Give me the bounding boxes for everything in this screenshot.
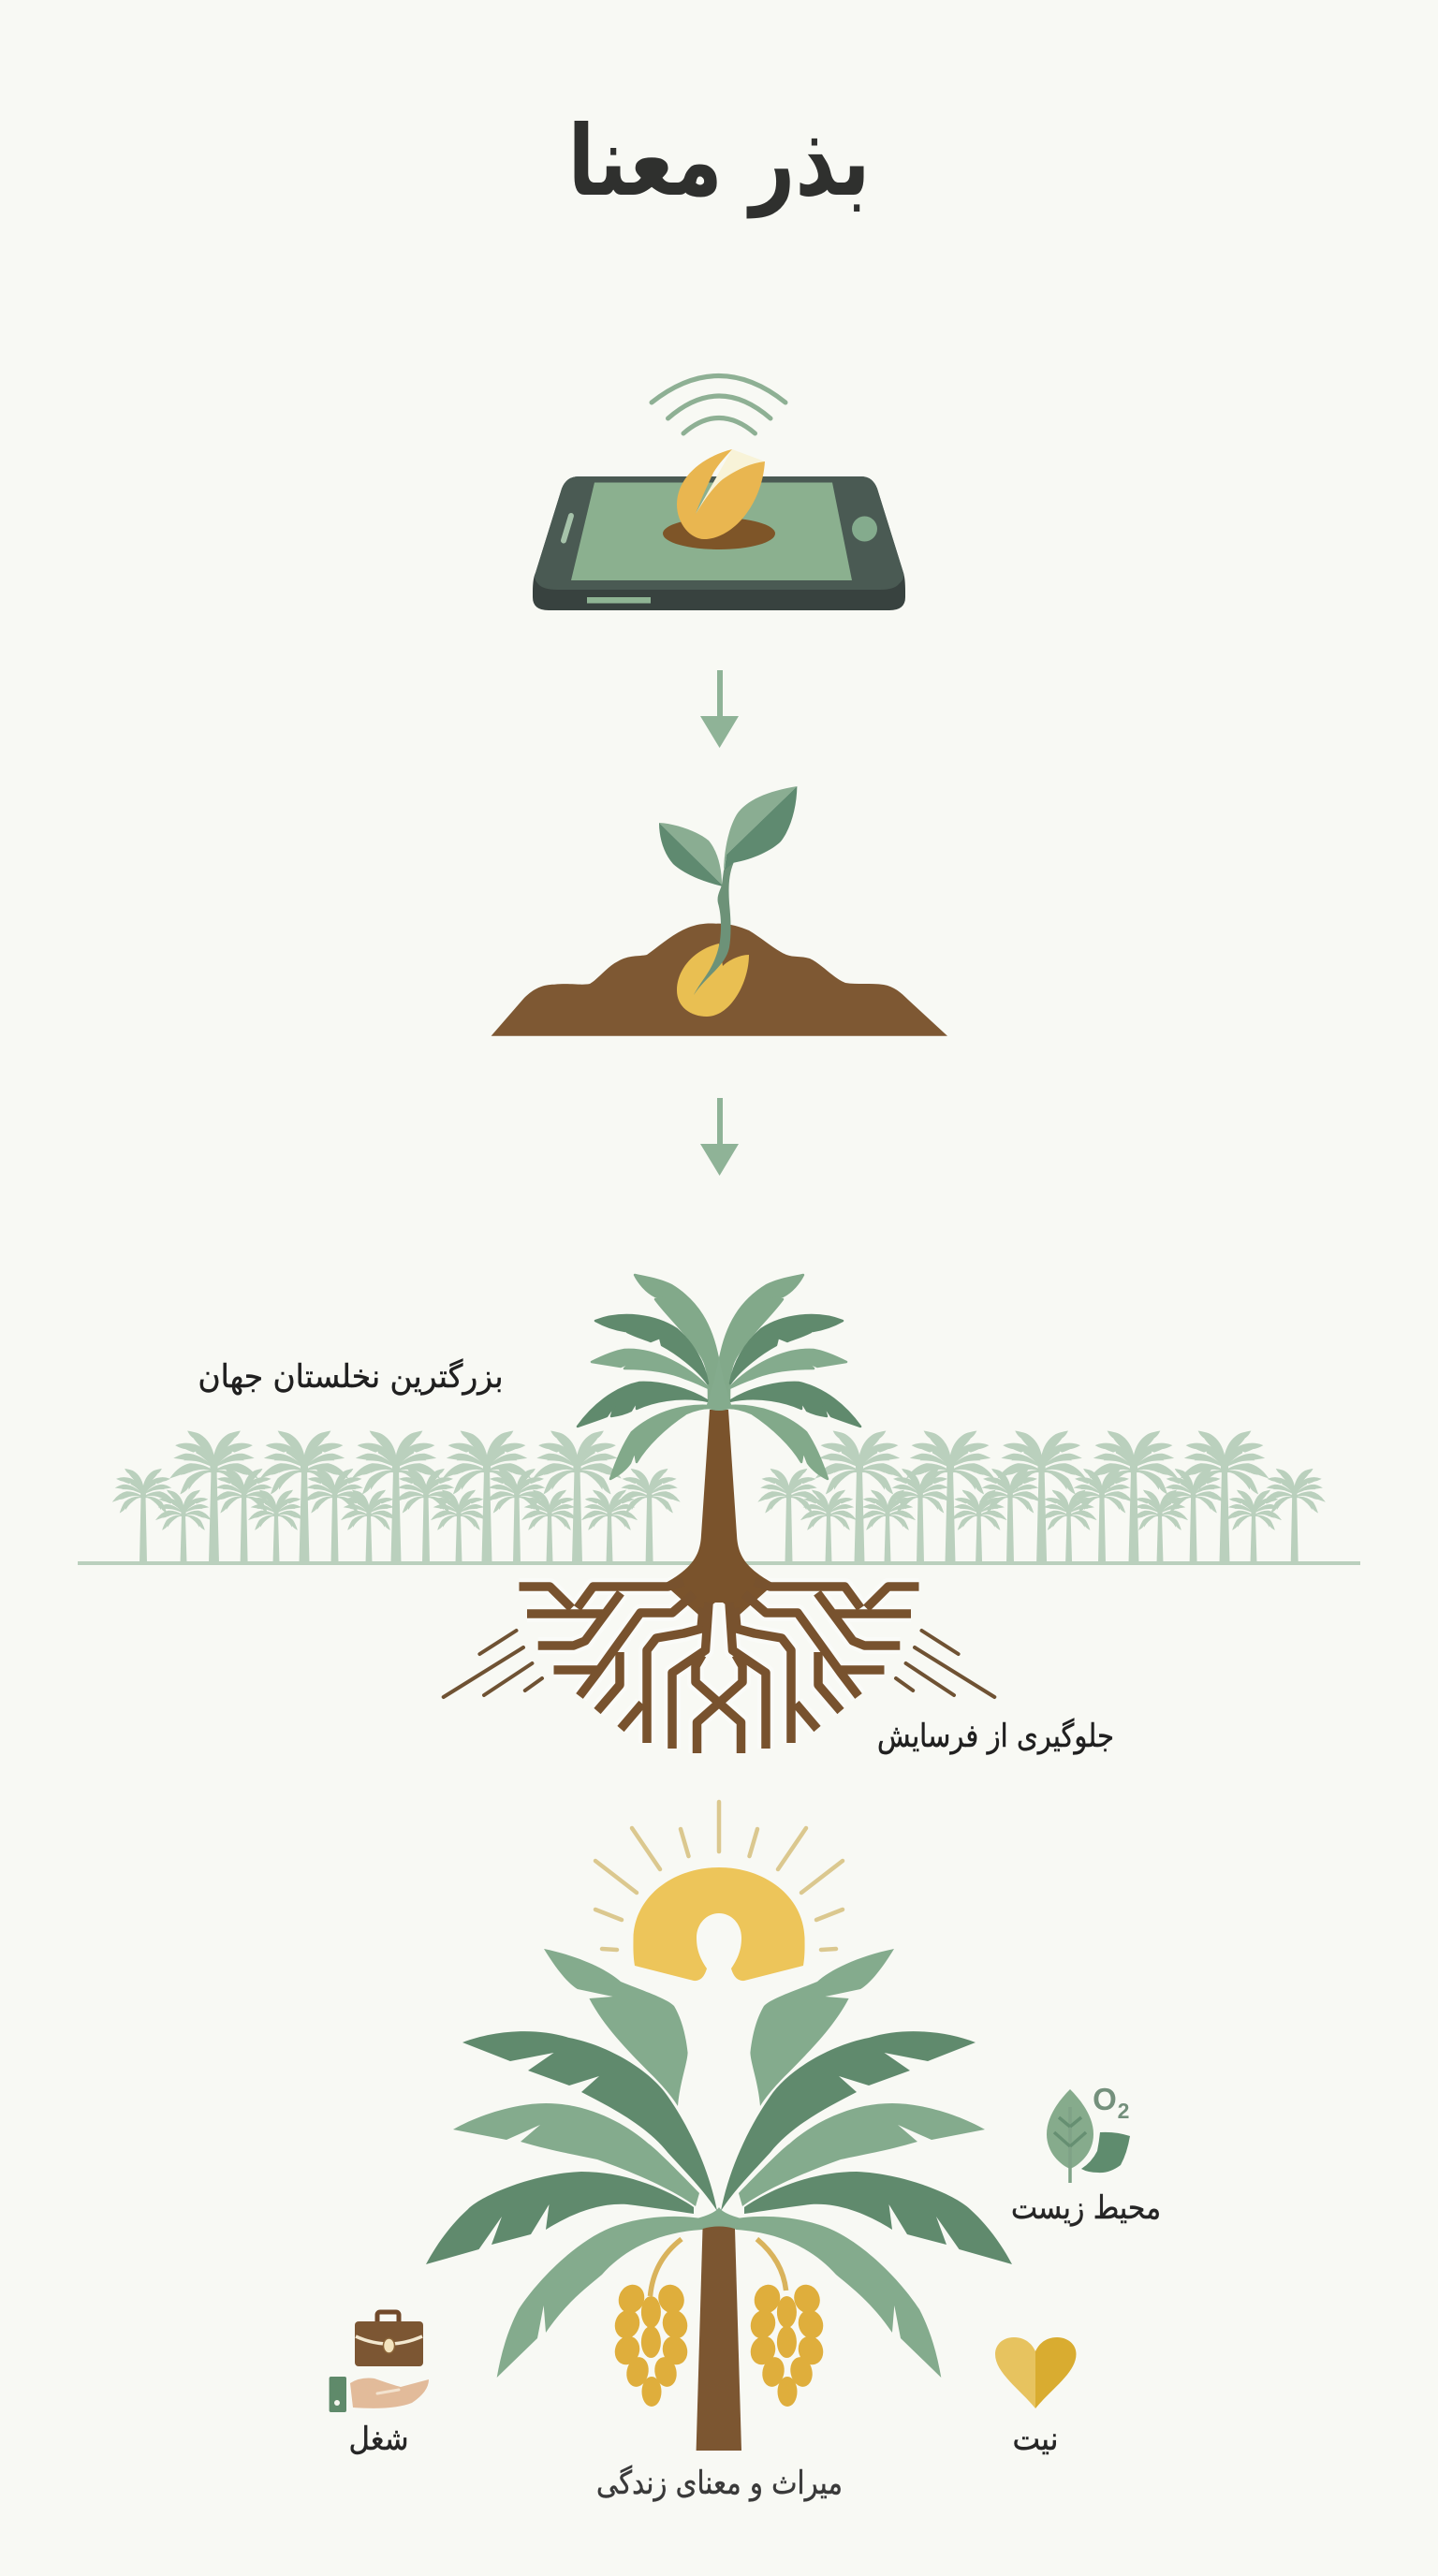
speaker slot — [564, 516, 571, 541]
sun disc — [633, 1867, 805, 1981]
icon: leaf with oxygen — [1047, 2082, 1130, 2183]
label: erosion prevention: جلوگیری از فرسایش — [877, 1718, 1114, 1755]
ground line — [78, 1561, 1360, 1565]
briefcase body — [355, 2321, 423, 2366]
O2 label — [1093, 2082, 1129, 2123]
crown hub — [689, 2207, 749, 2232]
sun — [595, 1802, 843, 1981]
title: بذر معنا — [567, 104, 871, 218]
date cluster right — [747, 2281, 827, 2407]
erosion lines — [444, 1631, 994, 1697]
bottom bar — [587, 597, 651, 603]
large palm tree with dates — [426, 1949, 1012, 2451]
O2 label: 2 — [1118, 2099, 1129, 2123]
icon: sprout in soil — [492, 786, 947, 1036]
sleeve — [330, 2377, 346, 2412]
roots — [519, 1582, 919, 1753]
seed — [677, 944, 749, 1017]
heart right half — [1035, 2337, 1077, 2408]
phone body — [533, 476, 905, 610]
trunk — [697, 2226, 741, 2451]
stem — [694, 863, 734, 995]
second leaf — [1081, 2132, 1130, 2173]
date stalks — [650, 2239, 786, 2296]
briefcase clasp — [384, 2338, 395, 2353]
seed — [677, 449, 765, 539]
briefcase handle — [377, 2312, 399, 2325]
icon: briefcase and hand — [330, 2312, 429, 2412]
phone screen — [571, 483, 852, 580]
heart left half — [995, 2337, 1035, 2408]
icon: heart — [995, 2337, 1077, 2408]
soil mound — [492, 923, 947, 1036]
label: environment: محیط زیست — [1011, 2189, 1161, 2227]
label: intention: نیت — [1013, 2421, 1058, 2458]
O2 label: O — [1093, 2082, 1117, 2116]
palm crown — [578, 1275, 860, 1479]
central palm with roots — [444, 1275, 994, 1753]
seed fissure — [696, 449, 765, 514]
arrow 1 — [700, 670, 739, 748]
fronds right — [721, 1949, 1012, 2378]
label: job: شغل — [348, 2421, 408, 2458]
right leaf — [724, 786, 797, 875]
trunk and root hub — [664, 1410, 774, 1615]
hand — [350, 2378, 429, 2408]
briefcase flap — [356, 2336, 422, 2344]
soil hole — [663, 518, 775, 549]
fronds left — [426, 1949, 717, 2378]
arrow 2 — [700, 1098, 739, 1176]
left leaf — [659, 823, 722, 886]
label: largest palm grove: بزرگترین نخلستان جهان — [198, 1358, 504, 1396]
wireless signal arcs — [652, 376, 785, 433]
sun rays — [595, 1802, 843, 1950]
icon: phone with seed and wireless signal — [533, 376, 905, 610]
root halo — [519, 1582, 919, 1753]
leaf veins — [1054, 2107, 1086, 2183]
main leaf — [1047, 2089, 1093, 2169]
home button — [852, 517, 877, 541]
label: legacy and meaning of life: میراث و معنای زندگی — [596, 2465, 843, 2502]
date cluster left — [611, 2281, 691, 2407]
palm grove row — [78, 1432, 1360, 1565]
